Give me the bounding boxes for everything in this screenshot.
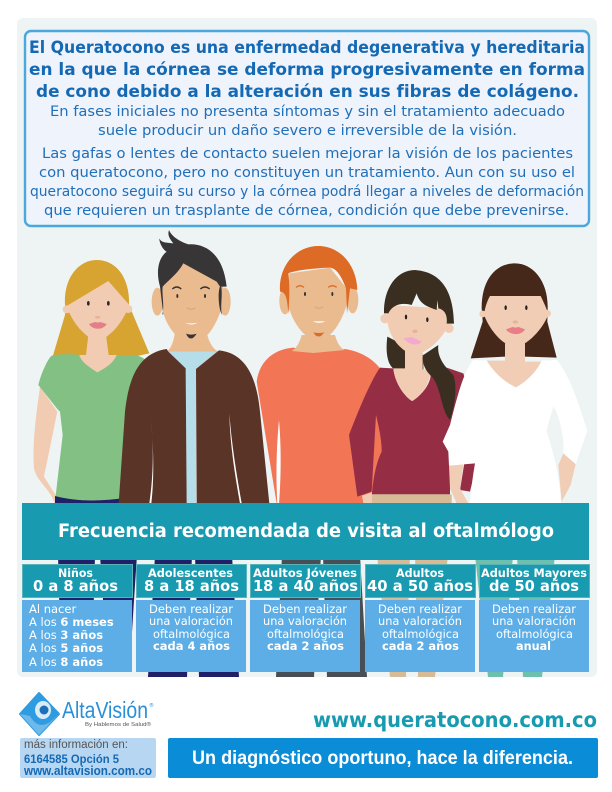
column: niños: Al nacer: [29, 602, 76, 616]
person: woman with white top: [443, 263, 587, 503]
logo: Alta Visión: ®: [149, 702, 154, 709]
slogan banner: [168, 738, 598, 778]
table header: Frecuencia recomendada de visita al oftalmólogo: [58, 521, 554, 542]
person: red-haired man head: [279, 246, 358, 353]
column: adultos jóvenes: [250, 564, 360, 672]
logo: Alta Visión: By Hablemos de Salud®: [85, 721, 151, 728]
column: niños: 0 a 8 años: [33, 577, 118, 595]
person: coral man body: [257, 348, 385, 503]
column: niños: A los 5 años: [29, 641, 103, 655]
website url: www.queratocono.com.co: [313, 708, 597, 732]
column: adolescentes: 8 a 18 años: [144, 577, 239, 595]
logo: Alta Visión: [20, 693, 154, 735]
intro text box: En fases iniciales no presenta síntomas y sin el tratamiento adecuado: [50, 104, 565, 120]
column: niños: A los 3 años: [29, 628, 103, 642]
column: adultos: una valoración: [378, 614, 462, 628]
column: adultos mayores: anual: [516, 639, 551, 653]
column: adultos mayores: Deben realizar: [492, 602, 576, 616]
intro text box: [25, 31, 589, 226]
background panel: [17, 18, 597, 677]
contact information box: más información en:: [24, 739, 128, 751]
column: adultos: Deben realizar: [378, 602, 462, 616]
column: adolescentes: [136, 564, 246, 672]
column: adultos mayores: [479, 564, 590, 672]
intro text box: El Queratocono es una enfermedad degenerativa y hereditaria: [29, 38, 585, 58]
column: adultos jóvenes: Deben realizar: [263, 602, 347, 616]
intro text box: en la que la córnea se deforma progresivamente en forma: [29, 60, 585, 80]
column: adultos mayores: de 50 años: [489, 577, 579, 595]
contact information box: 6164585 Opción 5: [24, 752, 119, 766]
column: niños: A los 6 meses: [29, 615, 114, 629]
column: niños: Niños: [58, 566, 93, 580]
column: niños: A los 8 años: [29, 655, 103, 669]
table header: [22, 503, 589, 560]
legs behind the table: [58, 555, 555, 677]
contact information box: www.altavision.com.co: [23, 764, 152, 778]
intro text box: con queratocono, pero no constituyen un tratamiento. Aun con su uso el: [39, 165, 575, 181]
column: adultos mayores: una valoración: [492, 614, 576, 628]
intro text box: queratocono seguirá su curso y la córnea podrá llegar a niveles de deformación: [30, 184, 584, 200]
contact information box: [20, 738, 156, 778]
column: adultos: cada 2 años: [382, 639, 459, 653]
column: adolescentes: cada 4 años: [153, 639, 230, 653]
column: adultos jóvenes: cada 2 años: [267, 639, 344, 653]
column: niños: [22, 564, 132, 672]
intro text box: de cono debido a la alteración en sus fibras de colágeno.: [36, 82, 579, 102]
column: adultos: oftalmológica: [382, 627, 459, 641]
person: man with brown jacket: [119, 230, 269, 503]
column: adultos jóvenes: una valoración: [263, 614, 347, 628]
column: adultos jóvenes: oftalmológica: [267, 627, 344, 641]
column: adultos jóvenes: Adultos Jóvenes: [253, 566, 357, 580]
column: adultos: [365, 564, 476, 672]
intro text box: Las gafas o lentes de contacto suelen mejorar la visión de los pacientes: [42, 146, 573, 162]
column: adolescentes: oftalmológica: [153, 627, 230, 641]
column: adultos: 40 a 50 años: [367, 577, 473, 595]
person: blonde woman: [34, 260, 149, 503]
column: adolescentes: Adolescentes: [148, 566, 233, 580]
slogan banner: Un diagnóstico oportuno, hace la diferencia.: [192, 747, 573, 769]
intro text box: suele producir un daño severo e irreversible de la visión.: [98, 123, 517, 139]
column: adultos: Adultos: [396, 566, 444, 580]
column: adultos mayores: oftalmológica: [496, 627, 573, 641]
column: adolescentes: una valoración: [149, 614, 233, 628]
column: adultos jóvenes: 18 a 40 años: [253, 577, 358, 595]
intro text box: que requieren un trasplante de córnea, condición que debe prevenirse.: [44, 203, 569, 219]
column: adolescentes: Deben realizar: [149, 602, 233, 616]
column: adultos mayores: Adultos Mayores: [481, 566, 587, 580]
logo: Alta Visión: AltaVisión: [62, 697, 148, 723]
person: woman with burgundy top: [349, 270, 480, 503]
